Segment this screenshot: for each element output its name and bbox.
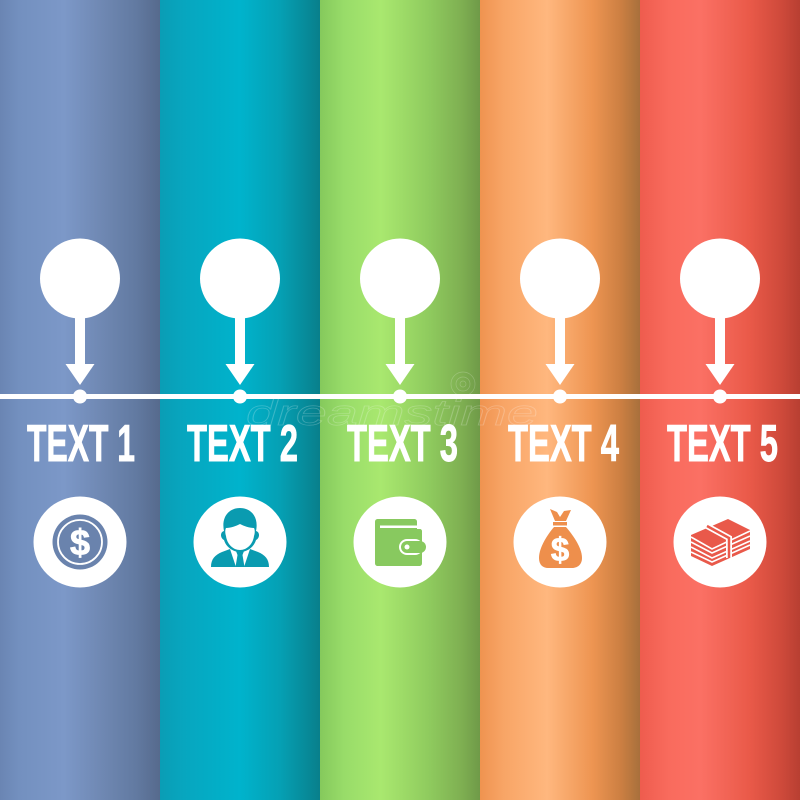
panel: column 1 <box>0 0 160 800</box>
icon: businessman <box>194 496 286 588</box>
pin marker 4 <box>520 238 600 404</box>
icon: dollar coin: $ <box>70 522 90 563</box>
panel: column 5 <box>640 0 800 800</box>
pin marker 2 <box>200 238 280 404</box>
icon: wallet <box>354 496 446 588</box>
panel: column 2 <box>160 0 320 800</box>
panel: column 4 <box>480 0 640 800</box>
icon: money bag: $ <box>551 531 569 568</box>
heading: TEXT 1: TEXT 1 <box>27 415 135 473</box>
pin marker 1 <box>40 238 120 404</box>
watermark: dreamstime <box>246 392 538 433</box>
pin marker 5 <box>680 238 760 404</box>
icon: money bag <box>514 496 606 588</box>
timeline line <box>0 394 800 399</box>
heading: TEXT 3: TEXT 3 <box>347 415 458 473</box>
heading: TEXT 2: TEXT 2 <box>187 415 298 473</box>
icon: dollar coin <box>34 496 126 588</box>
pin marker 3 <box>360 238 440 404</box>
panel: column 3 <box>320 0 480 800</box>
watermark <box>246 372 538 433</box>
heading: TEXT 4: TEXT 4 <box>508 415 619 473</box>
icon: stack of banknotes <box>674 496 766 588</box>
